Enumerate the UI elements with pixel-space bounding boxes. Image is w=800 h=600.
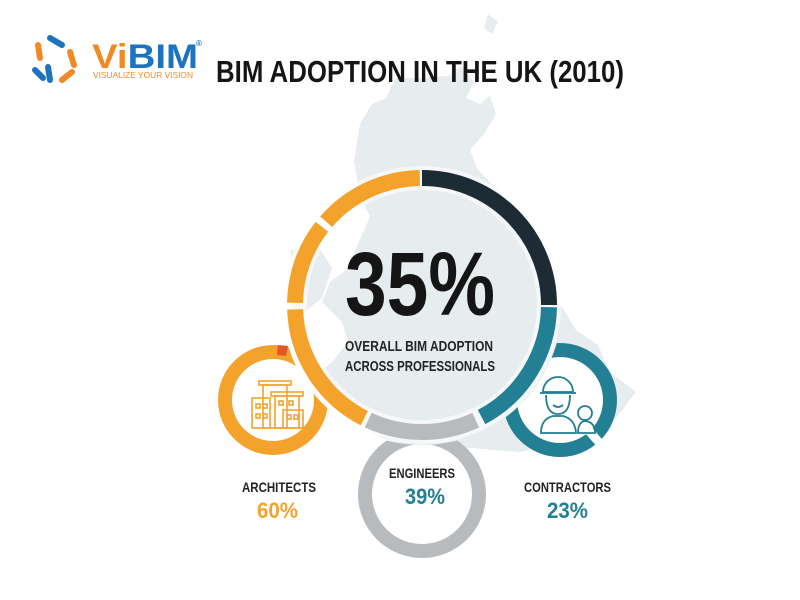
logo: VISUALIZE YOUR VISION	[93, 70, 193, 80]
logo	[35, 38, 202, 80]
icon: worker	[540, 377, 595, 433]
label: contractors: CONTRACTORS	[524, 479, 611, 495]
label: engineers	[389, 465, 455, 509]
big ring	[295, 178, 549, 432]
label: architects: 60%	[257, 498, 298, 523]
label: contractors: 23%	[547, 498, 588, 523]
main stat: OVERALL BIM ADOPTION	[345, 339, 493, 355]
main stat: 35%	[345, 235, 495, 335]
label: engineers: 39%	[405, 484, 445, 509]
background map of UK	[286, 14, 636, 452]
ring: contractors	[510, 350, 610, 450]
small rings	[225, 345, 610, 551]
main stat	[345, 235, 495, 375]
ring: engineers	[365, 437, 479, 551]
icon: buildings	[252, 381, 303, 428]
label: engineers: ENGINEERS	[389, 465, 455, 481]
icon: logo mark	[35, 38, 74, 80]
label: architects: ARCHITECTS	[242, 479, 316, 495]
label: contractors	[524, 479, 611, 523]
logo: ®	[196, 39, 202, 48]
title: BIM ADOPTION IN THE UK (2010)	[216, 54, 624, 89]
ring: architects	[225, 345, 321, 448]
main stat: ACROSS PROFESSIONALS	[345, 359, 495, 375]
label: architects	[242, 479, 316, 523]
logo: ViBIM	[92, 38, 198, 76]
